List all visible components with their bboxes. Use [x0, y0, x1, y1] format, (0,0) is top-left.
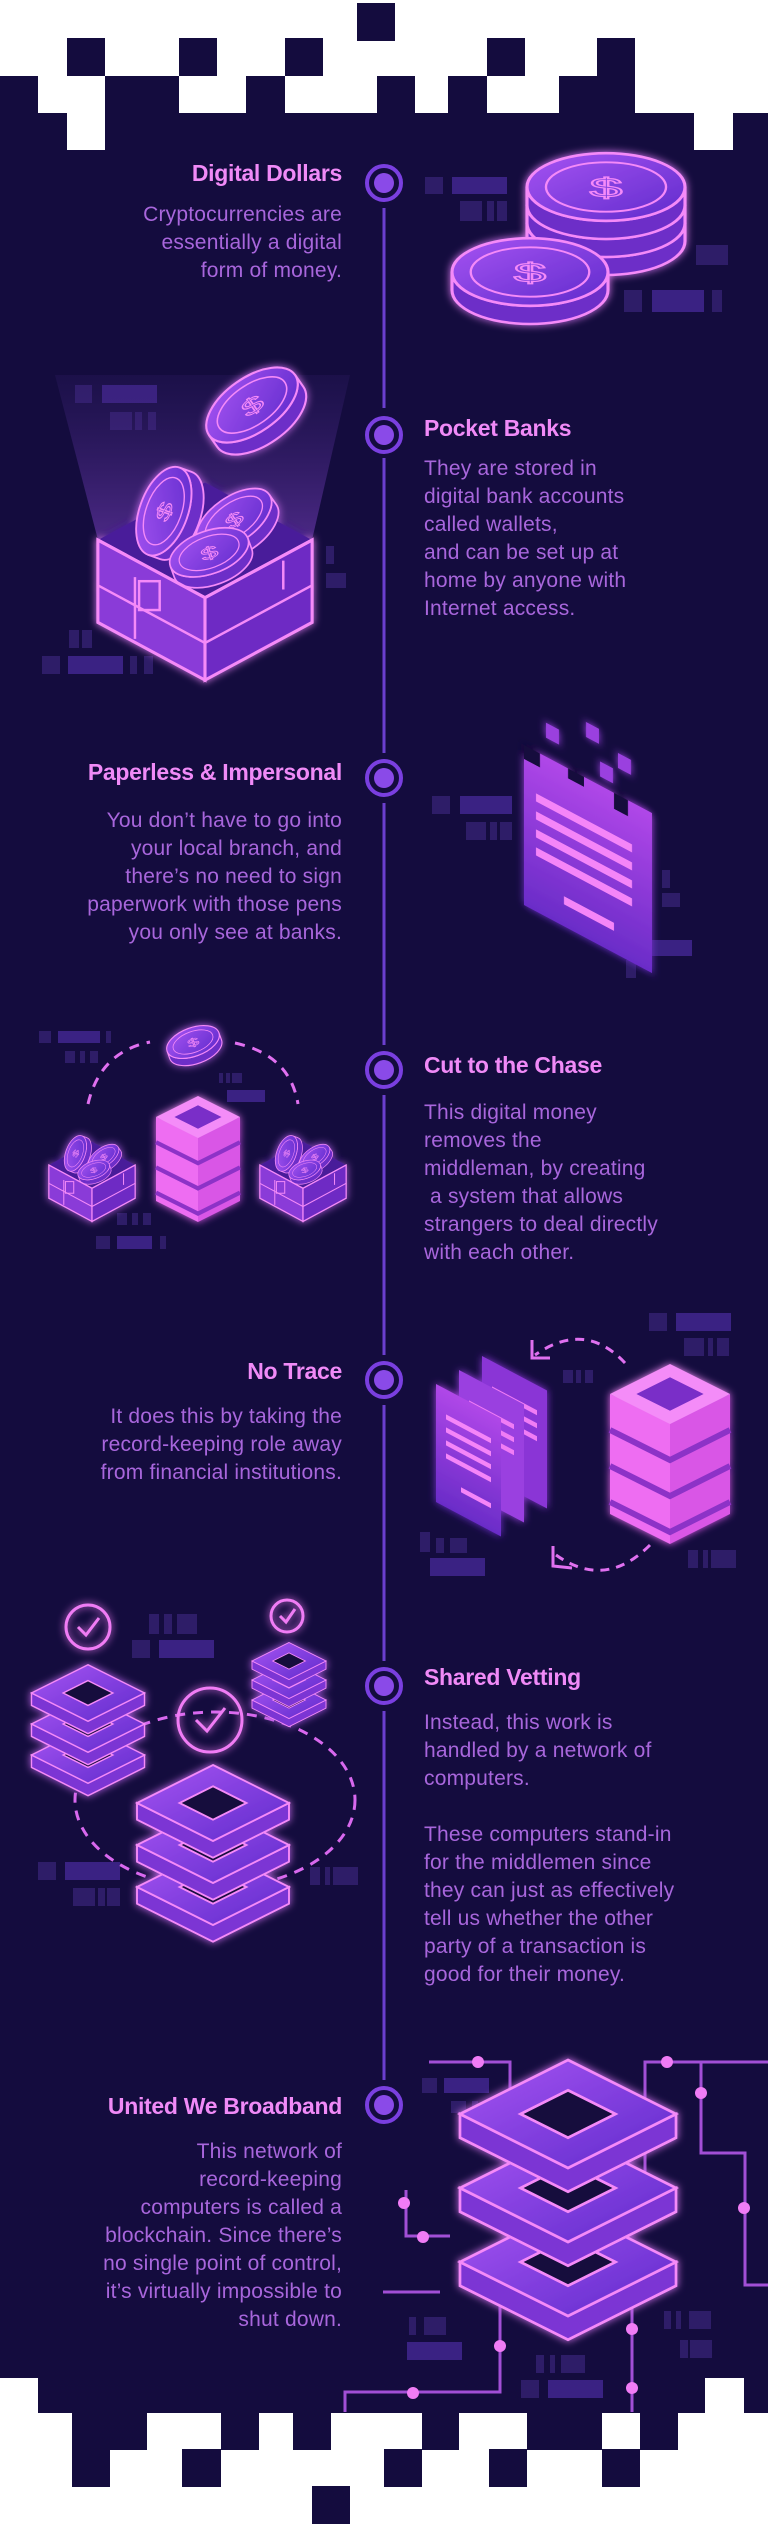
icon: network of validating computers (shared vetting)	[32, 1600, 355, 1942]
icon: peer-to-peer exchange (cut to the chase)	[49, 1019, 346, 1222]
decorative data blocks	[38, 177, 736, 2398]
heading: Cut to the Chase: Cut to the Chase	[424, 1052, 602, 1078]
text: United We Broadband body: blockchain. Since there’s	[105, 2224, 342, 2247]
timeline line	[382, 208, 386, 2080]
text: United We Broadband body: it’s virtually impossible to	[106, 2280, 342, 2303]
text: No Trace body: record-keeping role away	[101, 1433, 342, 1456]
text: Digital Dollars body: form of money.	[201, 259, 342, 282]
text: Shared Vetting body: for the middlemen since	[424, 1851, 652, 1874]
text: United We Broadband body	[103, 2140, 342, 2331]
text: Pocket Banks body: called wallets,	[424, 513, 558, 536]
text: Shared Vetting body: they can just as effectively	[424, 1879, 674, 1902]
text: Paperless body: You don’t have to go into	[107, 809, 342, 832]
text: Digital Dollars body: essentially a digital	[162, 231, 342, 254]
text: No Trace body: from financial institutions.	[101, 1461, 342, 1484]
text: Cut to the Chase body: a system that allows	[430, 1185, 623, 1208]
icon: blockchain stack with circuit (united we broadband)	[345, 2056, 768, 2412]
text: Paperless body: paperwork with those pens	[87, 893, 342, 916]
text: Digital Dollars body	[143, 203, 342, 282]
text: Shared Vetting body: party of a transaction is	[424, 1935, 646, 1958]
heading: No Trace: No Trace	[247, 1358, 342, 1384]
text: Paperless body: your local branch, and	[131, 837, 342, 860]
text: United We Broadband body: This network of	[197, 2140, 342, 2163]
text: Shared Vetting body: good for their money.	[424, 1963, 625, 1986]
heading: Paperless & Impersonal: Paperless & Impersonal	[88, 759, 342, 785]
text: Cut to the Chase body: with each other.	[424, 1241, 574, 1264]
text: Pocket Banks body: home by anyone with	[424, 569, 626, 592]
text: Pocket Banks body: Internet access.	[424, 597, 575, 620]
text: United We Broadband body: no single point of control,	[103, 2252, 342, 2275]
text: Shared Vetting body: computers.	[424, 1767, 530, 1790]
text: Paperless body: there’s no need to sign	[125, 865, 342, 888]
icon: documents and server exchange (no trace)	[436, 1339, 730, 1570]
text: Cut to the Chase body	[424, 1101, 658, 1264]
text: Cut to the Chase body: middleman, by creating	[424, 1157, 646, 1180]
text: Digital Dollars body: Cryptocurrencies are	[143, 203, 342, 226]
text: Shared Vetting body: Instead, this work is	[424, 1711, 613, 1734]
text: Paperless body	[87, 809, 342, 944]
text: Pocket Banks body: They are stored in	[424, 457, 597, 480]
heading: Pocket Banks: Pocket Banks	[424, 415, 571, 441]
heading: Shared Vetting: Shared Vetting	[424, 1664, 581, 1690]
text: Shared Vetting body: handled by a network of	[424, 1739, 652, 1762]
text: Cut to the Chase body: removes the	[424, 1129, 542, 1152]
text: Paperless body: you only see at banks.	[129, 921, 342, 944]
icon: wallet box with coins (pocket banks)	[55, 353, 350, 680]
text: Cut to the Chase body: strangers to deal directly	[424, 1213, 658, 1236]
text: Shared Vetting body: tell us whether the other	[424, 1907, 653, 1930]
text: United We Broadband body: record-keeping	[199, 2168, 342, 2191]
text: Shared Vetting body	[424, 1711, 674, 1986]
icon: coin stacks (digital dollars)	[452, 153, 685, 324]
text: No Trace body	[100, 1405, 342, 1484]
text: Pocket Banks body: digital bank accounts	[424, 485, 624, 508]
text: Cut to the Chase body: This digital money	[424, 1101, 597, 1124]
text: United We Broadband body: shut down.	[238, 2308, 342, 2331]
heading: Digital Dollars: Digital Dollars	[192, 160, 342, 186]
timeline dots	[367, 166, 401, 2122]
icon: paper document (paperless)	[524, 689, 652, 973]
text: Shared Vetting body: These computers stand-in	[424, 1823, 672, 1846]
text: Pocket Banks body	[424, 457, 626, 620]
text: United We Broadband body: computers is called a	[141, 2196, 342, 2219]
text: No Trace body: It does this by taking the	[110, 1405, 342, 1428]
text: Pocket Banks body: and can be set up at	[424, 541, 618, 564]
heading: United We Broadband: United We Broadband	[108, 2093, 342, 2119]
